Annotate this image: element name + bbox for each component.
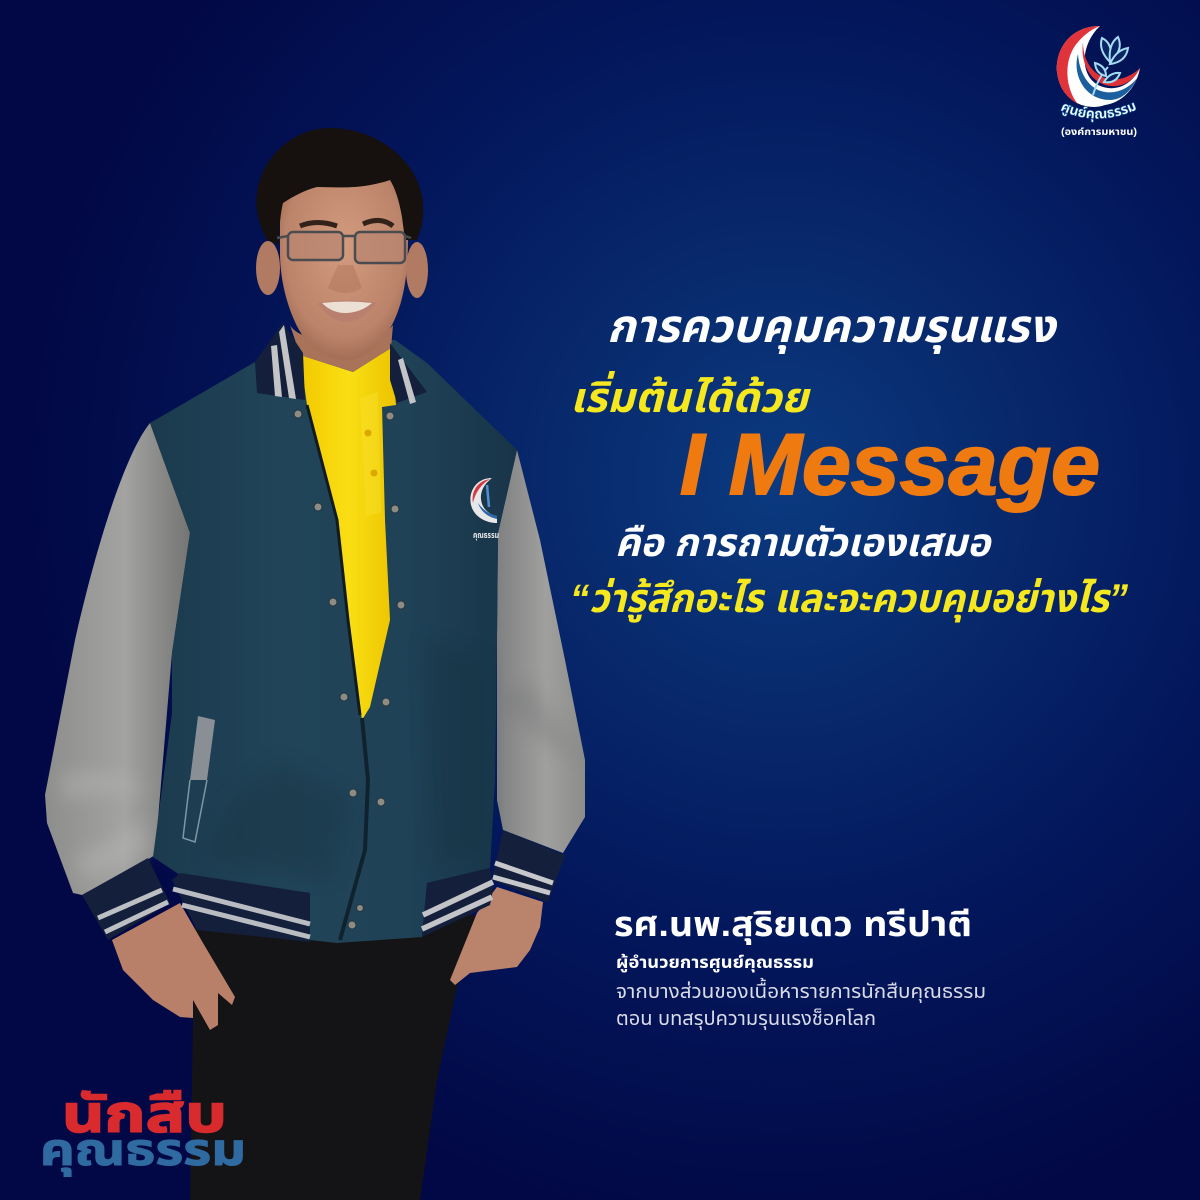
glasses — [277, 232, 411, 263]
organisation logo — [1056, 26, 1140, 138]
leaf sprig — [1093, 37, 1128, 95]
jacket right rib hem — [422, 868, 493, 937]
programme name blue: คุณธรรม — [40, 1126, 246, 1177]
hair — [256, 128, 423, 245]
source line 2: ตอน บทสรุปความรุนแรงช็อคโลก — [616, 1008, 876, 1030]
headline line 3: คือ การถามตัวเองเสมอ — [615, 522, 992, 565]
snap buttons — [294, 410, 405, 929]
shirt buttons — [364, 430, 378, 476]
zip line — [307, 405, 360, 715]
right sleeve folds — [497, 680, 580, 760]
chest logo: คุณธรรม — [473, 530, 499, 540]
programme name red: นักสืบ — [62, 1086, 227, 1144]
chest logo — [470, 478, 499, 540]
neck — [290, 325, 393, 372]
headline I Message: I Message — [680, 417, 1100, 513]
left hand — [112, 903, 235, 1030]
pocket trim — [183, 716, 215, 842]
speaker title: ผู้อำนวยการศูนย์คุณธรรม — [616, 953, 814, 973]
jacket shading — [205, 640, 485, 880]
headline — [570, 300, 1128, 623]
jacket body — [150, 340, 517, 943]
eyebrows — [300, 220, 393, 226]
logo sub-label: (องค์การมหาชน) — [1061, 127, 1137, 138]
right collar stripes — [390, 343, 427, 404]
jacket left rib hem — [172, 873, 310, 942]
nose shading — [328, 265, 362, 293]
front opening — [340, 718, 368, 940]
right hand — [450, 887, 543, 985]
programme logo — [40, 1086, 246, 1177]
right sleeve — [497, 450, 585, 853]
left sleeve folds — [60, 772, 150, 880]
polo placket — [360, 392, 381, 516]
left cuff — [82, 858, 170, 940]
left sleeve — [45, 423, 190, 895]
headline line 1: การควบคุมความรุนแรง — [607, 300, 1058, 354]
headline line 4: “ว่ารู้สึกอะไร และจะควบคุมอย่างไร” — [570, 577, 1128, 623]
left ear — [256, 241, 280, 295]
blue crescent — [1077, 54, 1137, 100]
inner red crescent — [1083, 42, 1140, 86]
left collar stripes — [255, 323, 305, 400]
portrait: man in varsity jacket — [45, 128, 585, 1200]
speaker name: รศ.นพ.สุริยเดว ทรีปาตี — [614, 905, 972, 945]
logo wordmark: ศูนย์คุณธรรม — [1060, 102, 1136, 122]
face — [280, 165, 408, 360]
source line 1: จากบางส่วนของเนื้อหารายการนักสืบคุณธรรม — [616, 977, 986, 1003]
speaker credit — [614, 905, 986, 1030]
outer red crescent — [1057, 26, 1100, 104]
yellow polo shirt — [300, 348, 396, 720]
white crescent — [1057, 26, 1140, 107]
right cuff — [492, 830, 565, 902]
smile — [318, 300, 376, 322]
right ear — [406, 242, 428, 298]
trousers — [190, 915, 478, 1200]
headline line 2: เริ่มต้นได้ด้วย — [570, 370, 811, 421]
